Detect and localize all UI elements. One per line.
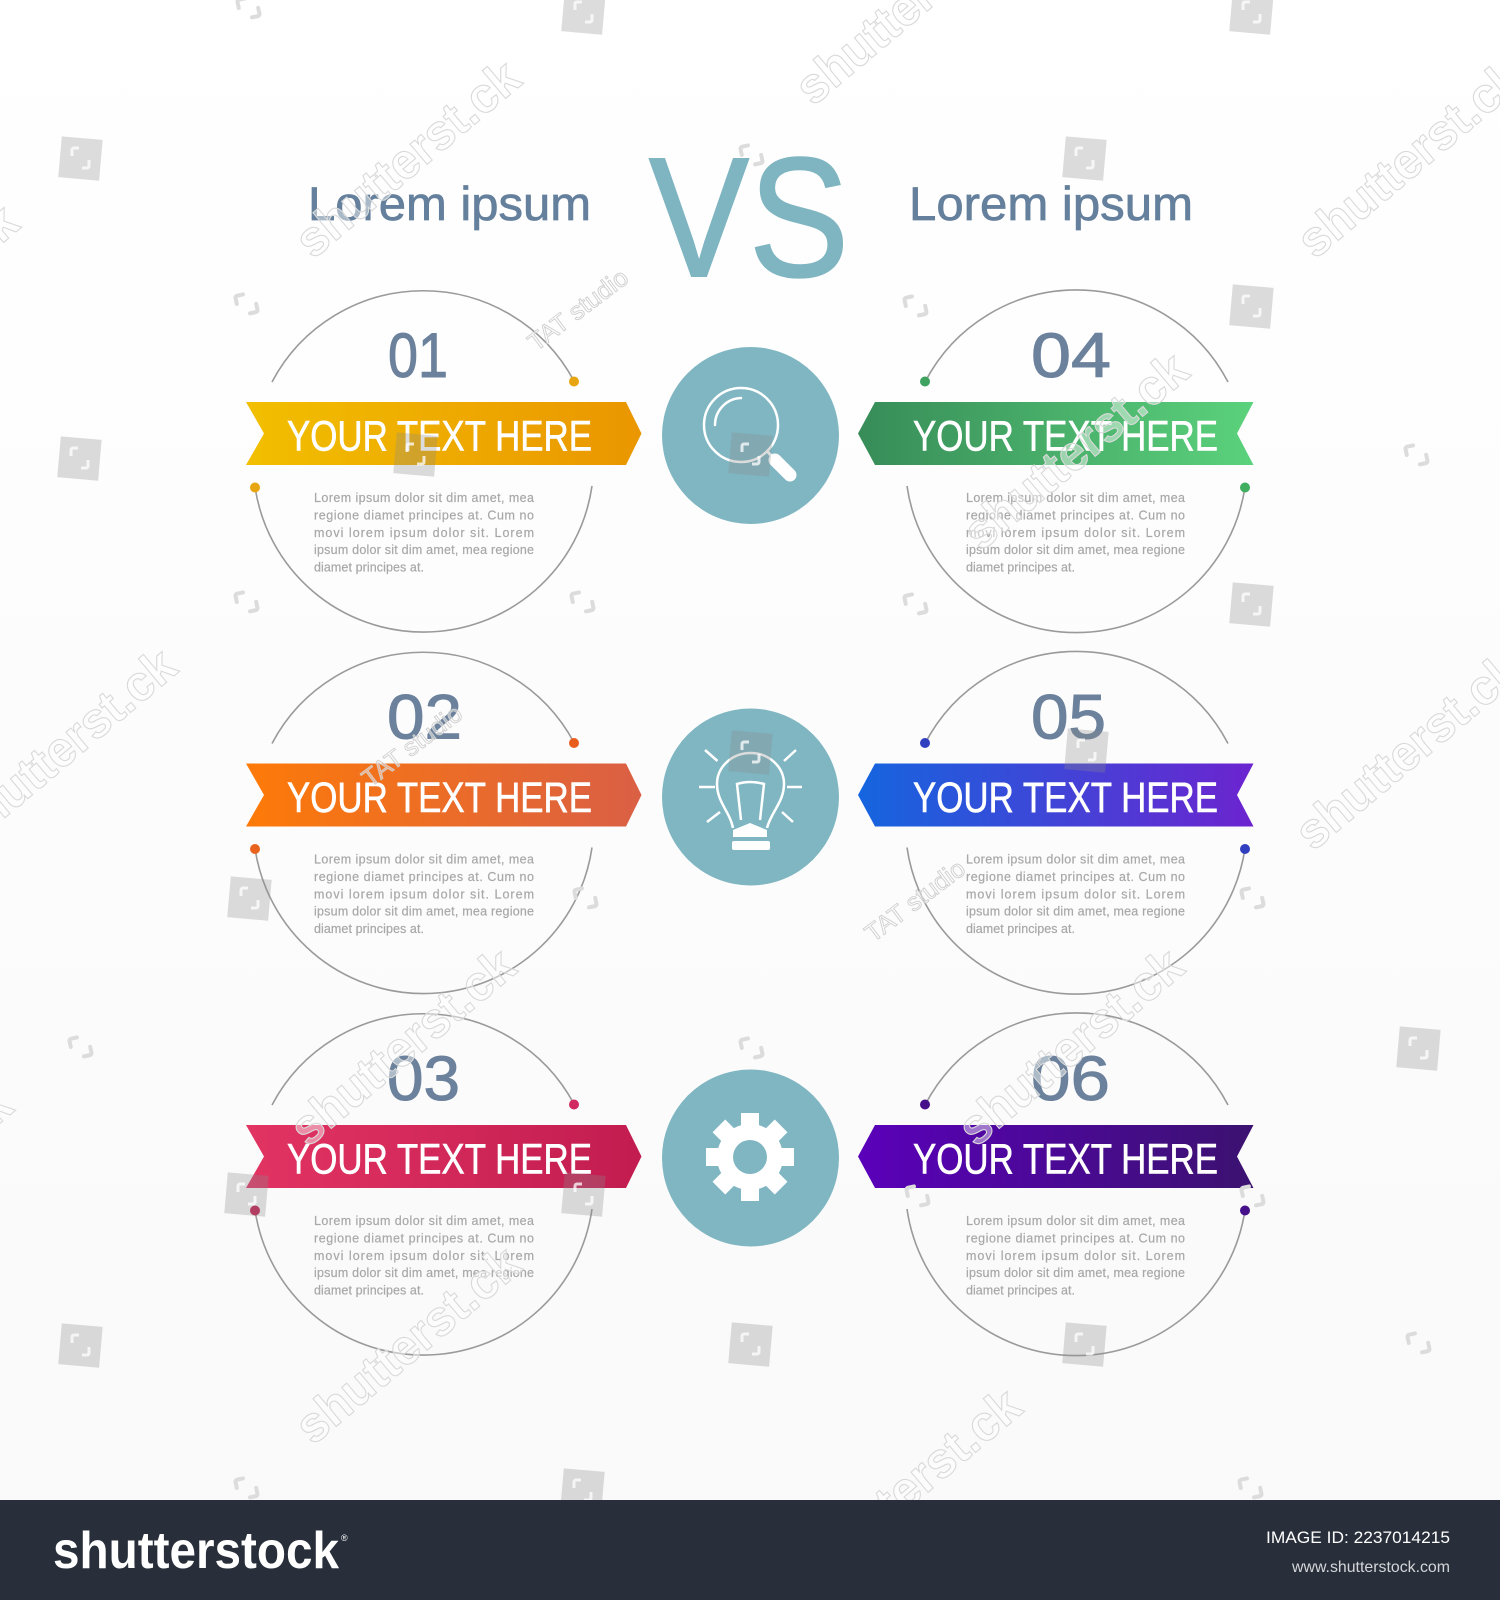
panel: item 06: ipsum dolor sit dim amet, mea regione [966,1266,1185,1280]
panel: item 05: Lorem ipsum dolor sit dim amet, mea [966,852,1185,866]
panel: item 05 [858,651,1254,994]
panel: item 01: 01 [388,321,448,391]
watermark layer: shutterst.ck [952,341,1199,560]
panel: item 06: regione diamet principes at. Cum no [966,1232,1185,1246]
panel: item 03: diamet principes at. [314,1284,424,1298]
icon: gear in circle [662,1070,839,1246]
footer bar: shutterstock [53,1522,339,1580]
watermark layer: shutterst.ck [279,937,526,1156]
panel: item 02: regione diamet principes at. Cum no [314,870,534,884]
heading: left title: Lorem ipsum [308,177,591,230]
panel: item 04 [858,290,1254,633]
panel: item 04: regione diamet principes at. Cum no [966,508,1185,522]
panel: item 05: diamet principes at. [966,922,1075,936]
panel: item 03: regione diamet principes at. Cum no [314,1232,534,1246]
icon: light bulb in circle [662,708,839,886]
panel: item 02: ipsum dolor sit dim amet, mea regione [314,904,534,918]
heading: right title: Lorem ipsum [909,177,1193,230]
panel: item 04: 04 [1031,321,1111,391]
watermark layer: TAT studio [357,699,468,793]
panel: item 05: ipsum dolor sit dim amet, mea regione [966,904,1185,918]
panel: item 01 [246,291,642,632]
panel: item 06: Lorem ipsum dolor sit dim amet, mea [966,1214,1185,1228]
panel: item 01: diamet principes at. [314,560,424,574]
watermark layer: TAT studio [860,854,971,948]
panel: item 06 [858,1013,1254,1356]
panel: item 02: 02 [387,682,462,752]
panel: item 06: YOUR TEXT HERE [913,1136,1218,1184]
panel: item 05: 05 [1031,682,1106,752]
panel: item 04: Lorem ipsum dolor sit dim amet, mea [966,491,1185,505]
panel: item 04: diamet principes at. [966,560,1075,574]
heading: VS: VS [649,123,849,313]
panel: item 06: movi lorem ipsum dolor sit. Lorem [966,1249,1185,1263]
watermark layer: shutterst.ck [284,1235,531,1454]
panel: item 02 [246,652,642,994]
panel: item 01: regione diamet principes at. Cum no [314,508,534,522]
panel: item 01: ipsum dolor sit dim amet, mea regione [314,543,534,557]
watermark layer: shutterst.ck [785,1377,1032,1596]
panel: item 02: diamet principes at. [314,922,424,936]
panel: item 04: movi lorem ipsum dolor sit. Lorem [966,526,1185,540]
panel: item 02: YOUR TEXT HERE [287,774,592,822]
panel: item 03: YOUR TEXT HERE [287,1136,592,1184]
panel: item 06: diamet principes at. [966,1284,1075,1298]
watermark layer: shutterst.ck [284,49,531,268]
panel: item 04: ipsum dolor sit dim amet, mea regione [966,543,1185,557]
panel: item 02: movi lorem ipsum dolor sit. Lorem [314,888,534,902]
panel: item 05: regione diamet principes at. Cum no [966,870,1185,884]
panel: item 01: movi lorem ipsum dolor sit. Lorem [314,526,534,540]
footer bar: www.shutterstock.com [1291,1559,1450,1576]
panel: item 03: movi lorem ipsum dolor sit. Lorem [314,1249,534,1263]
watermark layer: TAT studio [523,263,634,357]
panel: item 03 [246,1014,642,1355]
panel: item 03: 03 [387,1044,460,1114]
panel: item 06: 06 [1031,1044,1110,1114]
panel: item 05: YOUR TEXT HERE [913,774,1218,822]
panel: item 02: Lorem ipsum dolor sit dim amet, mea [314,852,534,866]
panel: item 03: Lorem ipsum dolor sit dim amet, mea [314,1214,534,1228]
panel: item 05: movi lorem ipsum dolor sit. Lorem [966,888,1185,902]
footer bar: ® [341,1533,348,1543]
panel: item 04: YOUR TEXT HERE [913,412,1218,460]
panel: item 03: ipsum dolor sit dim amet, mea regione [314,1266,534,1280]
icon: magnifying glass in circle [662,347,839,524]
panel: item 01: Lorem ipsum dolor sit dim amet, mea [314,491,534,505]
footer bar [0,1500,1500,1600]
footer bar: IMAGE ID: 2237014215 [1266,1528,1450,1547]
panel: item 01: YOUR TEXT HERE [287,412,592,460]
watermark layer: shutterst.ck [947,937,1194,1156]
